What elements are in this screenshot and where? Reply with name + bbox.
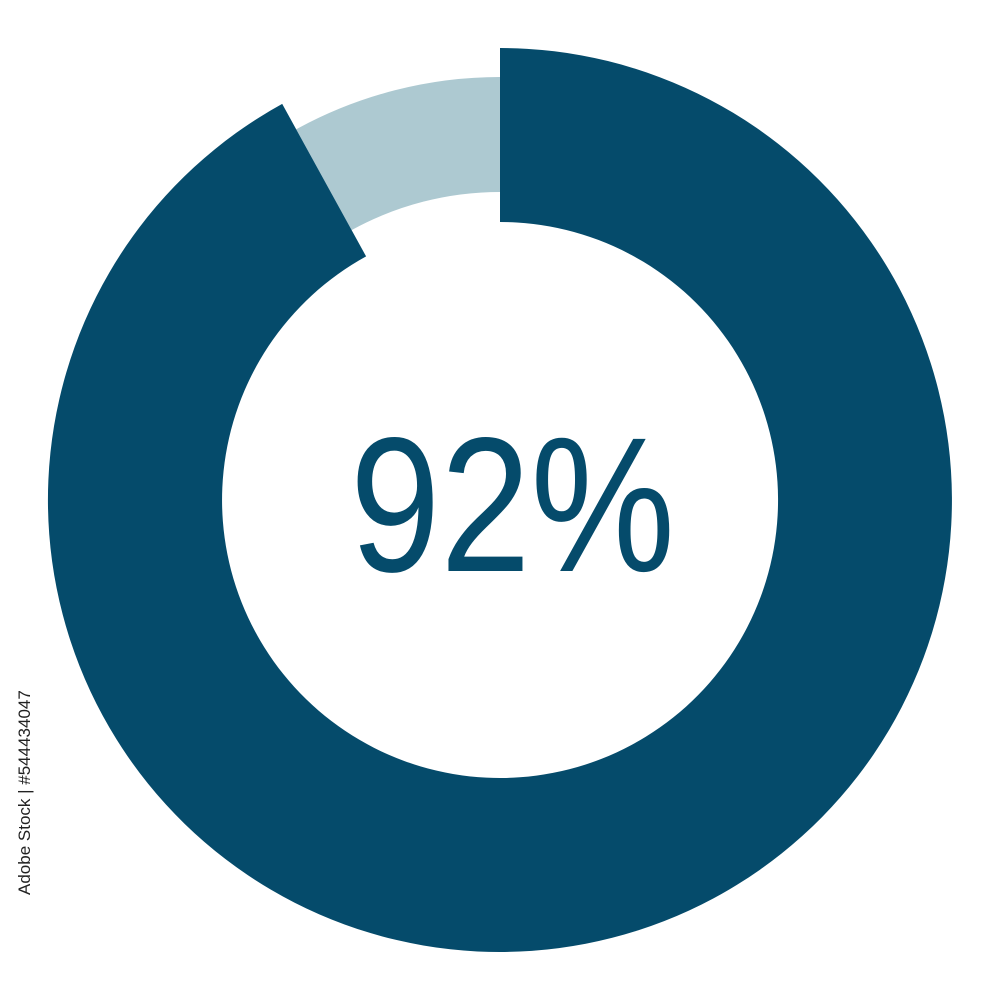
percentage label: 92% xyxy=(350,397,675,612)
remaining track segment xyxy=(296,77,500,230)
watermark id: Adobe Stock | #544434047 xyxy=(15,690,34,895)
